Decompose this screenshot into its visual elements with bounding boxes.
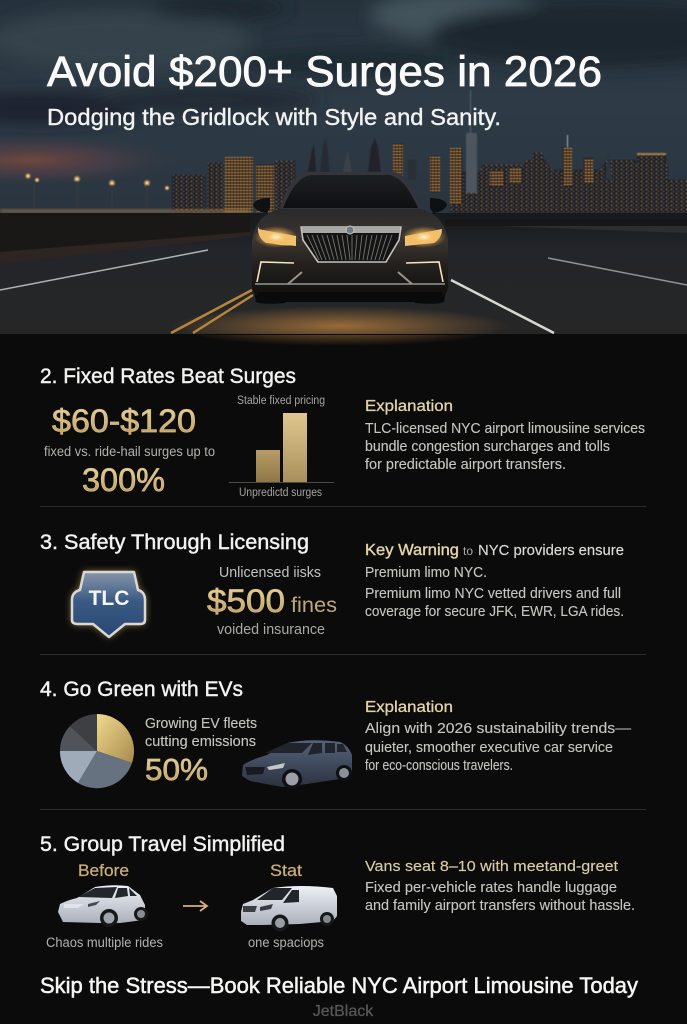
explanation: for predictable airport transfers.: [365, 457, 566, 473]
explanation: Explanation: [365, 398, 453, 415]
vans description: [365, 858, 635, 914]
stat: 500 dollar fines: fines: [291, 594, 337, 617]
explanation: [365, 398, 645, 473]
caption: after: one spaciops: [248, 935, 324, 950]
heading: safety: 3. Safety Through Licensing: [40, 530, 309, 554]
bar chart: [229, 395, 334, 499]
bar chart: Unpredictd surges: [239, 487, 322, 499]
key warning: Key Warning: [365, 542, 459, 559]
panel: safety: [40, 530, 624, 638]
icon: TLC badge: TLC: [89, 587, 129, 610]
pie chart: [60, 714, 134, 788]
text: voided insurance: voided insurance: [217, 622, 325, 638]
text: EV fleets: [145, 716, 257, 750]
panel: EVs: [40, 677, 632, 789]
heading: EVs: 4. Go Green with EVs: [40, 677, 243, 701]
key warning: NYC providers ensure: [478, 542, 624, 559]
hero photo: limousine on highway with NYC skyline: [0, 0, 687, 346]
key warning: Premium limo NYC.: [365, 565, 487, 581]
text: ride-hail comparison: fixed vs. ride-hail surges up to: [44, 444, 215, 459]
text: EV fleets: Growing EV fleets: [145, 716, 257, 732]
panel: fixed rates: [40, 364, 645, 499]
limousine: [252, 172, 448, 304]
panel: group travel: [40, 832, 635, 950]
call to action: Skip the Stress—Book Reliable NYC Airport Limousine Today: [40, 973, 638, 998]
explanation: bundle congestion surcharges and tolls: [365, 439, 610, 455]
skyline: [172, 90, 687, 215]
icon: SUV: [242, 740, 352, 789]
key warning: coverage for secure JFK, EWR, LGA rides.: [365, 604, 624, 620]
explanation: for eco-conscious travelers.: [365, 758, 513, 774]
text: EV fleets: cutting emissions: [145, 734, 256, 750]
key warning: [365, 542, 624, 620]
label: before: Before: [78, 862, 129, 880]
horizon lights: [0, 209, 250, 213]
arrow: [183, 901, 207, 911]
bar chart: Stable fixed pricing: [237, 395, 325, 407]
stat: 300 percent: 300%: [82, 462, 165, 498]
explanation: quieter, smoother executive car service: [365, 740, 613, 756]
icon: van: [241, 886, 337, 932]
vans description: and family airport transfers without hassle.: [365, 898, 635, 914]
explanation: TLC-licensed NYC airport limousiine services: [365, 421, 645, 437]
street lamps: [24, 172, 170, 209]
stat: 500 dollar fines: [207, 583, 337, 619]
icon: TLC badge: [72, 572, 145, 637]
explanation: Align with 2026 sustainability trends—: [365, 721, 632, 737]
key warning: Premium limo NYC vetted drivers and full: [365, 586, 621, 602]
icon: sedan: [58, 885, 148, 927]
explanation: [365, 699, 632, 774]
heading: fixed rates: 2. Fixed Rates Beat Surges: [40, 364, 296, 388]
title: Avoid $200+ Surges in 2026: [47, 48, 602, 96]
caption: before: Chaos multiple rides: [46, 935, 163, 950]
stat: 50 percent: 50%: [145, 752, 208, 787]
text: unlicensed risks: Unlicensed iisks: [219, 564, 321, 581]
explanation: Explanation: [365, 699, 453, 716]
label: stat: Stat: [270, 862, 302, 880]
subtitle: Dodging the Gridlock with Style and Sanity.: [47, 104, 501, 130]
heading: group travel: 5. Group Travel Simplified: [40, 832, 285, 856]
stat: fixed price: $60-$120: [52, 403, 196, 439]
brand: JetBlack: JetBlack: [313, 1003, 374, 1020]
vans description: Vans seat 8–10 with meetand-greet: [365, 858, 619, 875]
stat: 500 dollar fines: $500: [207, 583, 285, 619]
vans description: Fixed per-vehicle rates handle luggage: [365, 880, 617, 896]
road: [0, 213, 687, 334]
key warning: to: [463, 544, 473, 558]
